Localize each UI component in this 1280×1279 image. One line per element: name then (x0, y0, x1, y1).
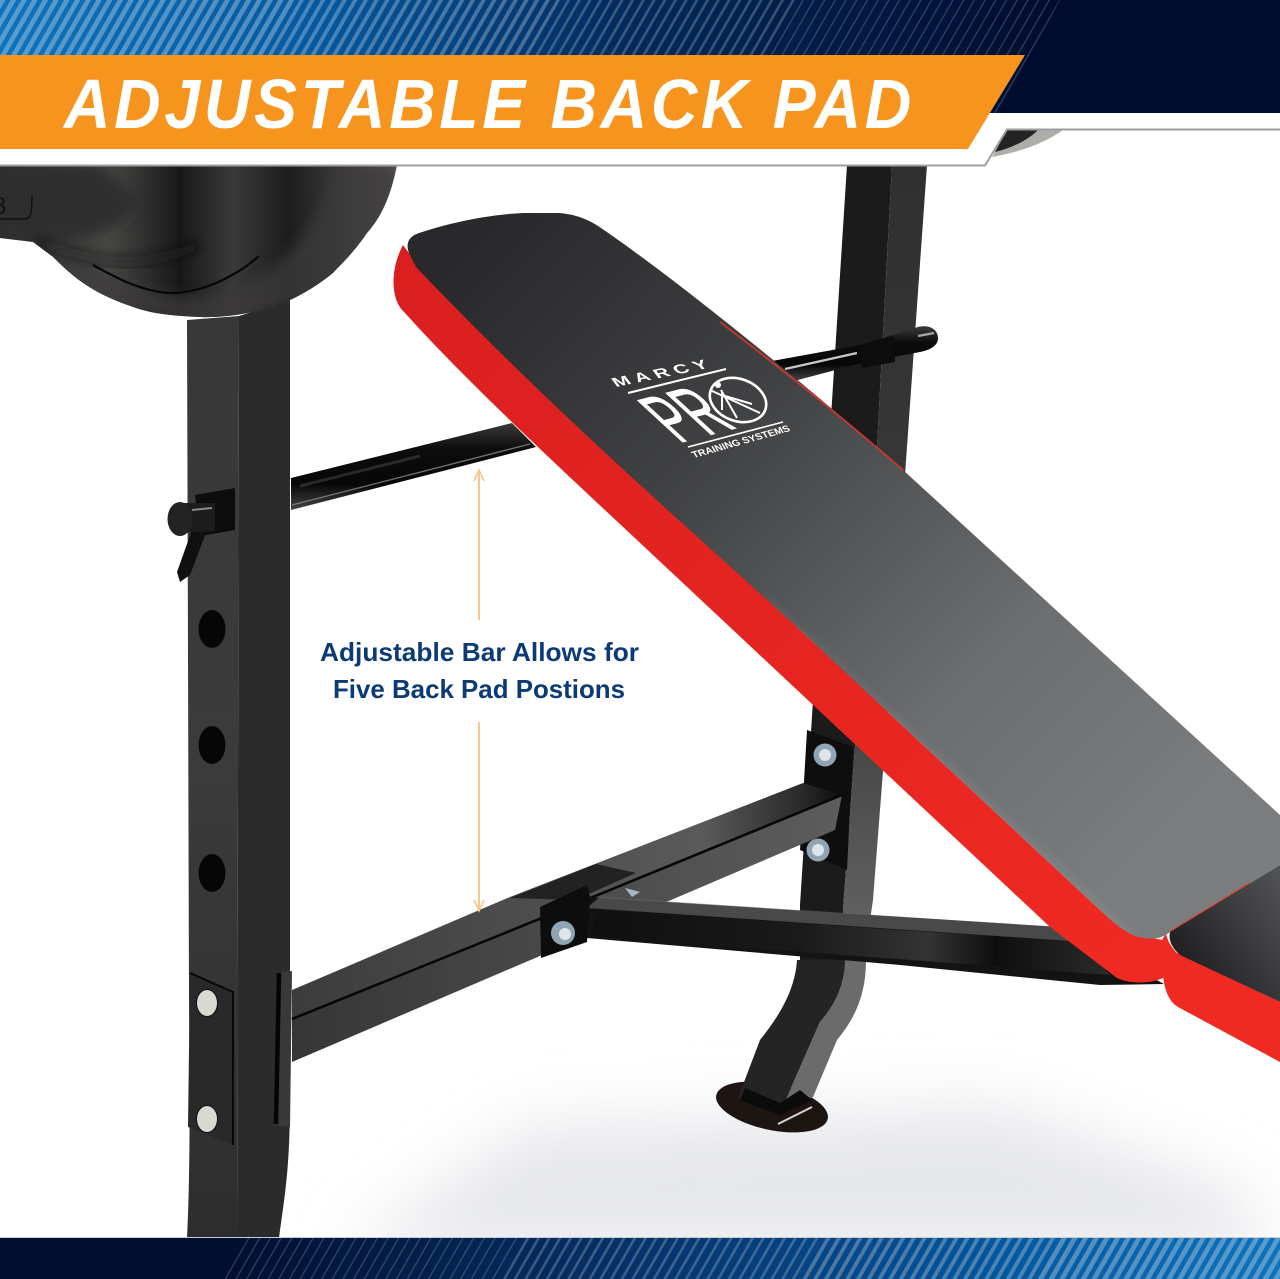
weight plate peeking behind header (992, 130, 1063, 157)
bolt upper (814, 744, 836, 766)
column holes (198, 610, 226, 892)
foot plate (711, 1073, 833, 1141)
left upright column (187, 300, 292, 1238)
cross brace arm (587, 897, 1164, 985)
brace joint bracket with bolt (540, 885, 640, 958)
pad edge shading (760, 605, 1135, 945)
logo upper rule (628, 369, 726, 393)
adjustment pin (168, 488, 235, 582)
pad top surface (408, 213, 1280, 939)
right rear upright and leg (711, 165, 927, 1141)
logo word marcy: MARCY (608, 356, 717, 390)
logo training systems: TRAINING SYSTEMS (690, 424, 793, 461)
round adjustment bar: left section (291, 423, 536, 510)
seat pad (1162, 865, 1280, 1062)
bolt lower (806, 838, 830, 862)
bottom banner (0, 1238, 1280, 1279)
floor shadow (340, 1105, 1270, 1255)
logo lower rule (688, 422, 783, 447)
pad top edge piping (720, 322, 903, 470)
barbell weight plates (0, 165, 400, 330)
lower height arrow (474, 722, 484, 911)
upper height arrow (474, 470, 484, 620)
callout text: Adjustable Bar Allows for (320, 637, 639, 667)
callout text: Five Back Pad Postions (333, 674, 625, 704)
top banner background (0, 0, 1280, 113)
logo circle with figure (704, 370, 772, 430)
side bracket (274, 971, 292, 1127)
rear bracket bolts (806, 744, 836, 862)
brand logo on pad (608, 356, 793, 461)
seam piping (1170, 883, 1250, 932)
round adjustment bar: right section (772, 326, 938, 381)
orange title banner (0, 55, 1025, 149)
curved leg (738, 960, 866, 1115)
pad red side (393, 245, 1165, 982)
rear bracket plate (800, 730, 853, 870)
title: ADJUSTABLE BACK PAD (62, 66, 911, 144)
column bracket with rivets (188, 973, 233, 1145)
lower brace arm (292, 783, 842, 1062)
logo letters pr: PR (619, 373, 752, 456)
adjustable back pad (393, 213, 1280, 982)
callout text (320, 637, 639, 704)
white header strip (0, 113, 1280, 166)
